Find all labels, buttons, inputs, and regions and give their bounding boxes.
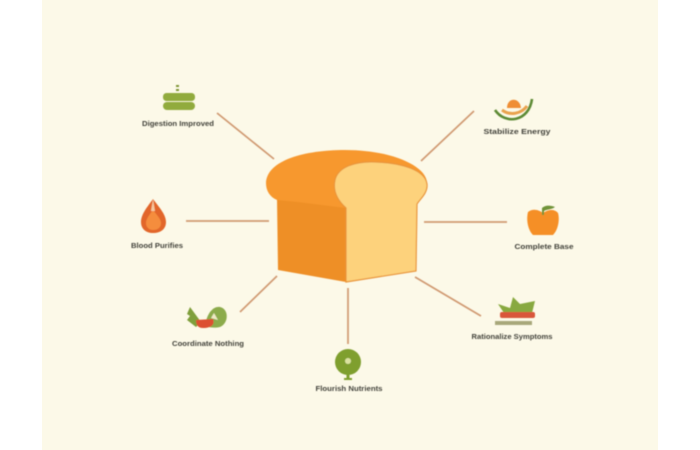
label: immune: Rationalize Symptoms [472, 332, 552, 341]
label: nutrients: Flourish Nutrients [316, 384, 382, 393]
label: digestion: Digestion Improved [142, 119, 214, 128]
icon: energy bowl [495, 99, 532, 119]
icon: vegetables [187, 307, 227, 328]
bread top crust [266, 150, 427, 208]
icon: tree nutrient [335, 349, 361, 380]
label: blood: Blood Purifies [131, 241, 183, 250]
bread slice face [334, 162, 427, 282]
icon: orange fruit [527, 206, 559, 235]
central bread loaf [266, 150, 427, 282]
icon: digestion [163, 85, 195, 110]
label: energy: Stabilize Energy [484, 127, 551, 136]
bread side crust [277, 198, 346, 282]
icon: flame drop [141, 199, 166, 233]
label: nothing: Coordinate Nothing [172, 339, 244, 348]
label: complete: Complete Base [514, 242, 574, 251]
connector lines [186, 111, 507, 344]
icon: leaf salad [495, 297, 535, 325]
labels [131, 119, 574, 393]
